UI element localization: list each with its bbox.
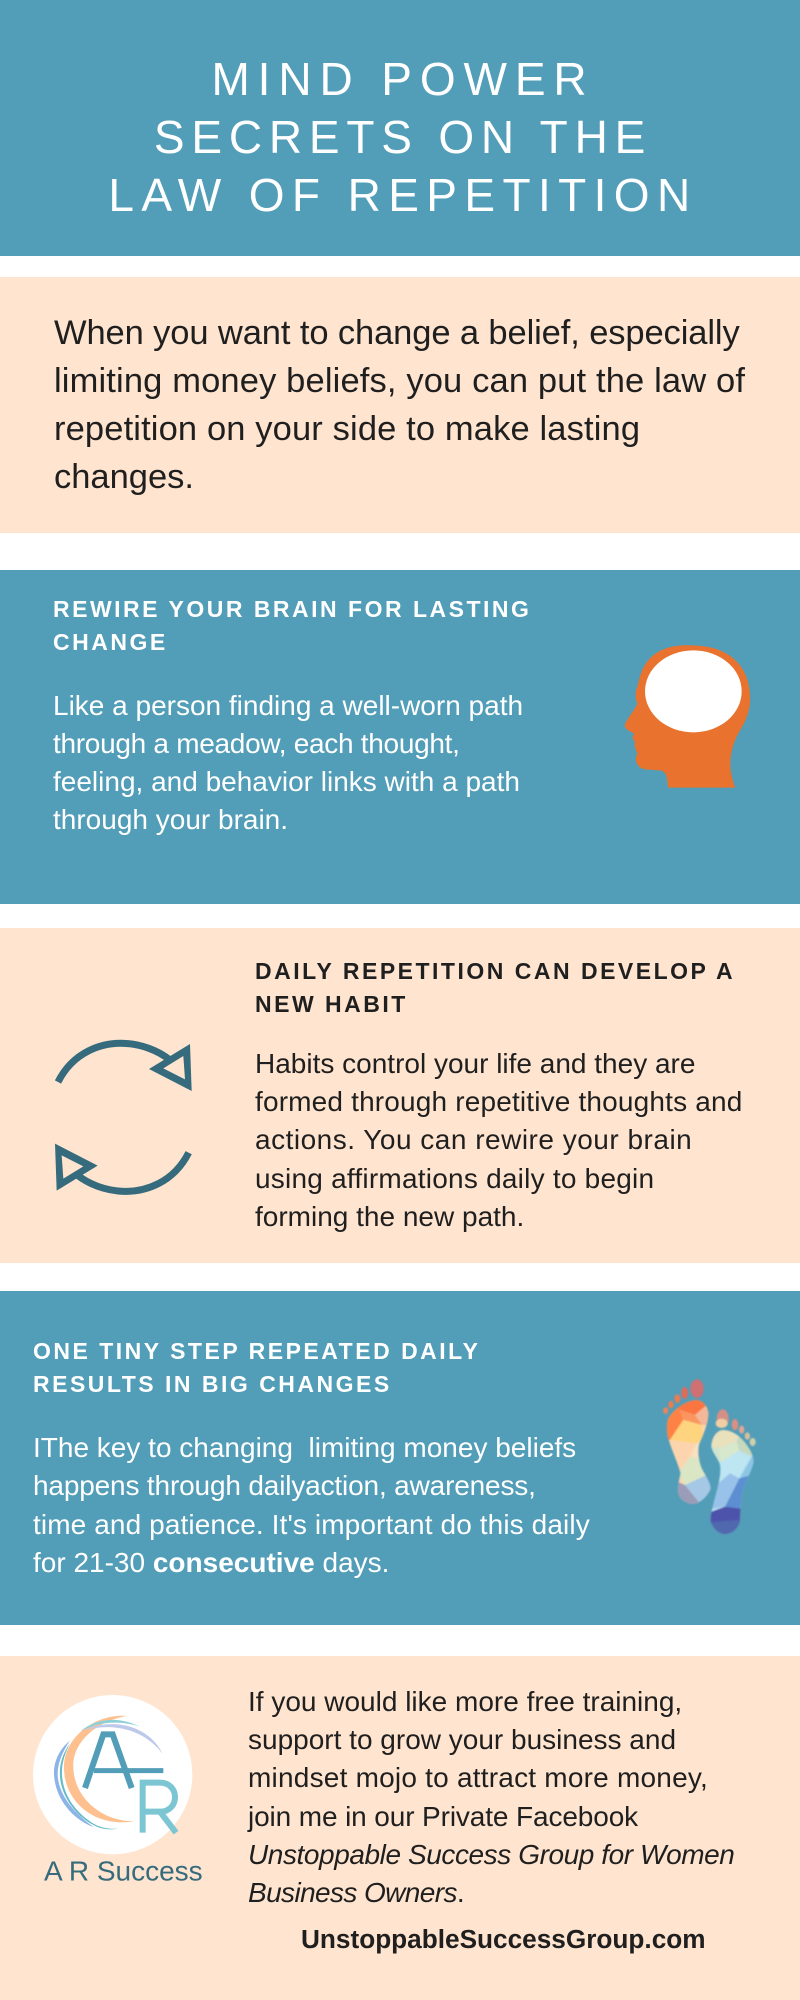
intro text xyxy=(54,314,745,496)
text: call to action: join me in our Private Facebook xyxy=(248,1801,638,1832)
intro text: changes. xyxy=(54,458,194,496)
intro text: When you want to change a belief, especially xyxy=(54,314,740,352)
panel: rewire your brain xyxy=(0,570,800,904)
text: call to action: Business Owners. xyxy=(248,1877,464,1908)
title: LAW OF REPETITION xyxy=(108,169,698,221)
text: rewire your brain: Like a person finding a well-worn path xyxy=(53,690,523,721)
heading: one tiny step: RESULTS IN BIG CHANGES xyxy=(33,1371,392,1397)
text: one tiny step xyxy=(33,1432,590,1578)
title: MIND POWER xyxy=(211,53,595,105)
panel: intro xyxy=(0,277,800,533)
text: call to action: Unstoppable Success Group for Women xyxy=(248,1839,734,1870)
heading: daily repetition xyxy=(255,958,735,1017)
heading: rewire your brain xyxy=(53,596,531,655)
text: call to action: If you would like more free training, xyxy=(248,1686,682,1717)
icon: footprints xyxy=(662,1378,756,1535)
text: call to action: support to grow your business and xyxy=(248,1724,676,1755)
icon: head with brain xyxy=(624,645,750,788)
text: call to action: mindset mojo to attract more money, xyxy=(248,1762,708,1793)
panel: one tiny step xyxy=(0,1291,800,1625)
heading: rewire your brain: REWIRE YOUR BRAIN FOR LASTING xyxy=(53,596,531,622)
text: rewire your brain: through your brain. xyxy=(53,804,288,835)
intro text: repetition on your side to make lasting xyxy=(54,410,640,448)
heading: daily repetition: DAILY REPETITION CAN DEVELOP A xyxy=(255,958,735,984)
panel: daily repetition xyxy=(0,928,800,1263)
heading: rewire your brain: CHANGE xyxy=(53,629,168,655)
logo: A R Success: A R Success xyxy=(44,1856,203,1887)
title xyxy=(108,53,698,221)
panel: title banner xyxy=(0,0,800,256)
heading: one tiny step: ONE TINY STEP REPEATED DAILY xyxy=(33,1338,480,1364)
title: SECRETS ON THE xyxy=(154,111,652,163)
heading: daily repetition: NEW HABIT xyxy=(255,991,408,1017)
text: rewire your brain: feeling, and behavior links with a path xyxy=(53,766,520,797)
text: daily repetition: forming the new path. xyxy=(255,1201,524,1232)
link: website: UnstoppableSuccessGroup.com xyxy=(301,1924,706,1954)
panel: call to action xyxy=(0,1656,800,2000)
text: daily repetition: Habits control your life and they are xyxy=(255,1048,695,1079)
logo: A R Success xyxy=(33,1695,203,1887)
text: daily repetition: actions. You can rewire your brain xyxy=(255,1124,692,1155)
text: daily repetition xyxy=(255,1048,742,1232)
text: one tiny step: for 21-30 consecutive days. xyxy=(33,1547,389,1578)
text: call to action xyxy=(247,1686,734,1908)
text: rewire your brain: through a meadow, each thought, xyxy=(53,728,460,759)
text: rewire your brain xyxy=(53,690,523,835)
text: daily repetition: formed through repetitive thoughts and xyxy=(255,1086,742,1117)
text: one tiny step: IThe key to changing limiting money beliefs xyxy=(33,1432,576,1463)
text: one tiny step: time and patience. It's important do this daily xyxy=(33,1509,590,1540)
intro text: limiting money beliefs, you can put the law of xyxy=(54,362,745,400)
text: one tiny step: happens through dailyaction, awareness, xyxy=(33,1470,536,1501)
icon: repeat arrows xyxy=(54,1040,192,1195)
heading: one tiny step xyxy=(33,1338,480,1397)
text: daily repetition: using affirmations daily to begin xyxy=(255,1163,654,1194)
